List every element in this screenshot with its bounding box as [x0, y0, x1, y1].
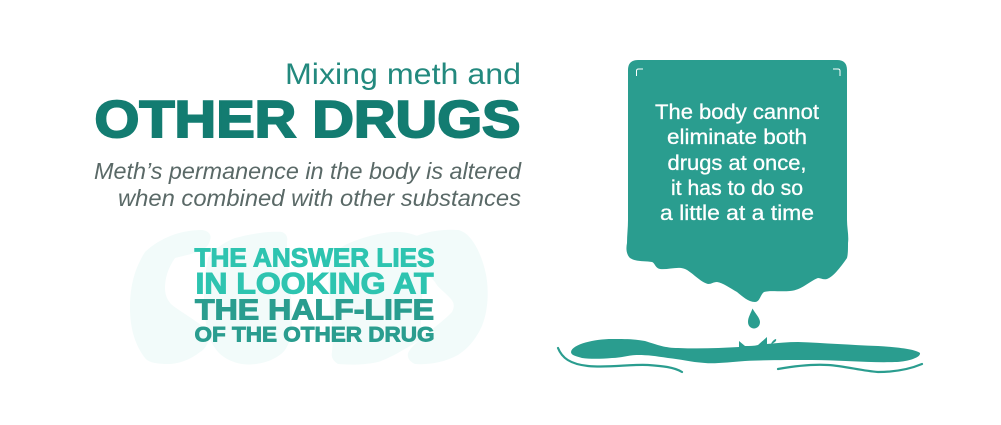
answer line 2: IN LOOKING AT [196, 268, 434, 300]
subtitle text: Meth’s permanence in the body is altered [94, 158, 522, 184]
answer line 4: OF THE OTHER DRUG [194, 322, 434, 346]
puddle with splash [558, 337, 922, 372]
callout text: a little at a time [660, 202, 814, 225]
heading line: Mixing meth and: Mixing meth and [285, 58, 521, 91]
heading line: OTHER DRUGS: OTHER DRUGS [94, 91, 520, 149]
subtitle text [94, 158, 522, 211]
answer line 3: THE HALF-LIFE [195, 294, 434, 326]
subtitle text: when combined with other substances [118, 185, 522, 211]
corner marks [636, 69, 840, 76]
callout text: drugs at once, [668, 152, 806, 175]
callout text: The body cannot [655, 101, 819, 124]
background blobs behind answer text [130, 230, 488, 365]
left ripple [558, 348, 682, 372]
callout text: it has to do so [671, 177, 803, 200]
answer line 1: THE ANSWER LIES [194, 244, 434, 272]
puddle shape [571, 337, 920, 363]
icon: falling drop [748, 308, 760, 328]
callout text: eliminate both [667, 126, 807, 149]
heading: Mixing meth and other drugs [94, 58, 521, 149]
callout text [655, 101, 819, 225]
answer text [194, 244, 434, 346]
dripping callout panel [626, 60, 848, 302]
right ripple [778, 364, 922, 372]
splash fleck [771, 339, 776, 344]
callout shape [626, 60, 848, 302]
